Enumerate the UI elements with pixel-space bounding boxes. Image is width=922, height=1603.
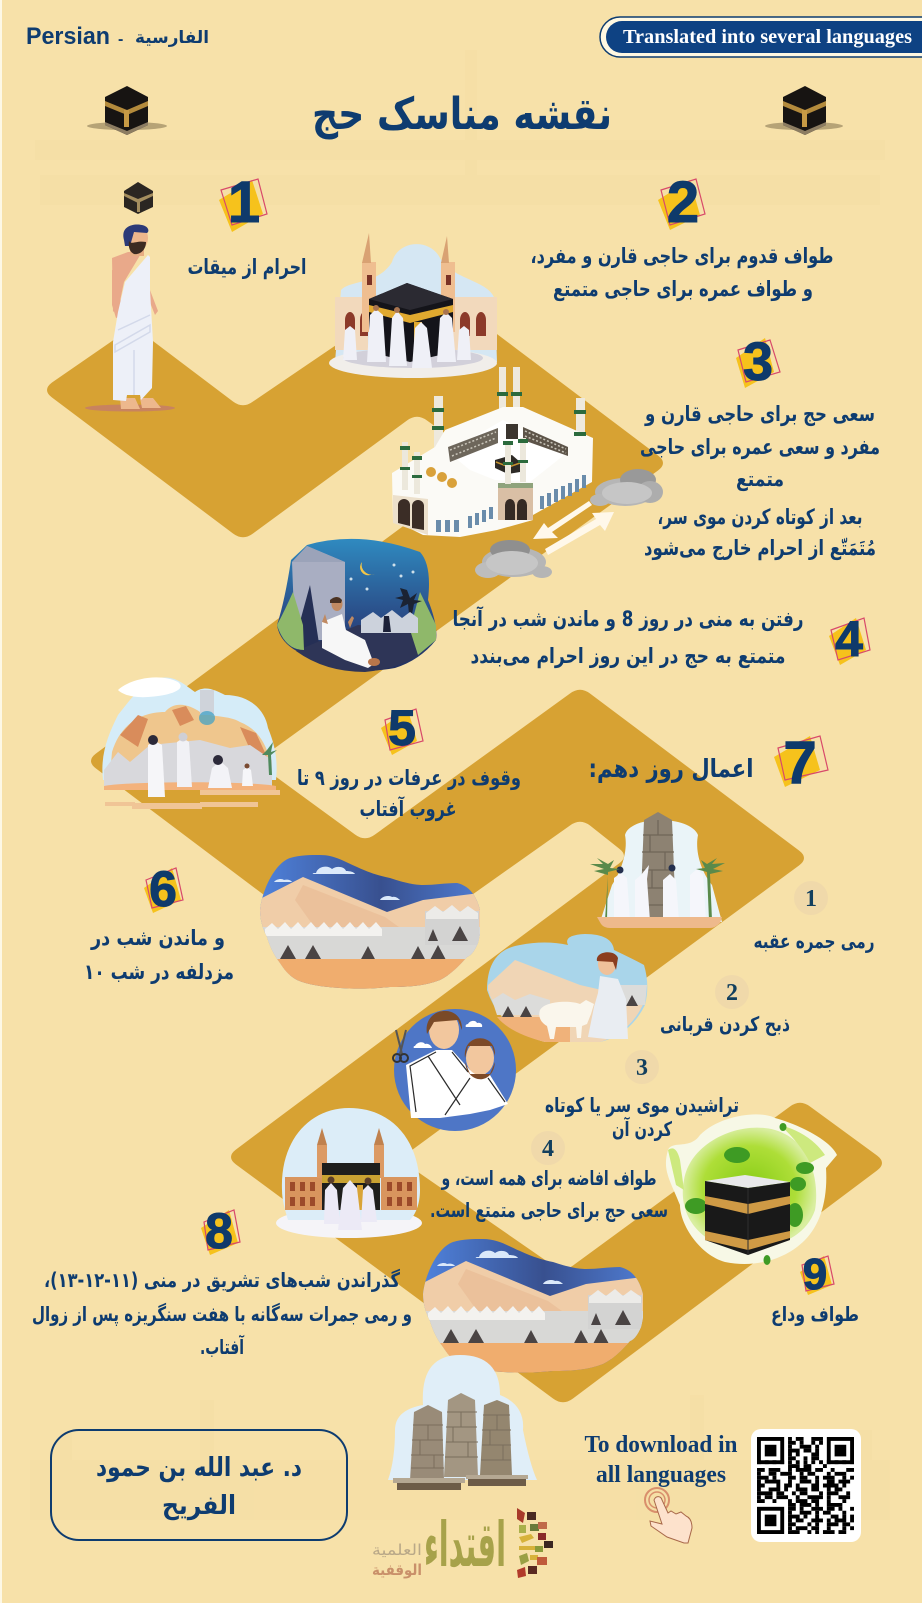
step 2 number: 2 (667, 170, 699, 235)
item 3 number: 3 (636, 1055, 648, 1081)
item 1 number: 1 (805, 886, 817, 912)
step 2 text: و طواف عمره برای حاجی متمتع (553, 277, 813, 301)
QR code (751, 1429, 861, 1542)
item 4 text: سعی حج برای حاجی متمتع است. (430, 1198, 668, 1222)
step 5 number: 5 (388, 700, 416, 756)
item 1 text: رمی جمره عقبه (754, 929, 874, 953)
item 4 number: 4 (542, 1136, 554, 1162)
step 6 text: مزدلفه در شب ۱۰ (84, 960, 234, 984)
step 8 number: 8 (205, 1203, 233, 1259)
icon: kaaba left (87, 86, 167, 135)
illustration: arafat (102, 677, 280, 809)
item 2 number: 2 (726, 980, 738, 1006)
item 4 text: طواف افاضه برای همه است، و (441, 1166, 656, 1190)
illustration: farewell kaaba on green splash (666, 1114, 837, 1265)
icon: kaaba right (765, 86, 843, 135)
step 5 text: غروب آفتاب (360, 796, 456, 821)
step 4 text: متمتع به حج در این روز احرام می‌بندد (470, 644, 786, 668)
step 6 text: و ماندن شب در (90, 926, 225, 950)
illustration: muzdalifah mountains (260, 855, 480, 993)
logo: الوقفية (372, 1561, 422, 1579)
step 5 text (297, 766, 521, 821)
icon: tapping hand (645, 1488, 692, 1543)
step 5 text: وقوف در عرفات در روز ۹ تا (297, 766, 521, 790)
author box: د. عبد الله بن حمود (96, 1453, 302, 1483)
step 6 number: 6 (149, 861, 177, 917)
step 2 text (530, 244, 834, 301)
illustration: tawaf ifadah kaaba (276, 1108, 422, 1238)
gold zigzag path (47, 286, 882, 1402)
step 8 text: گذراندن شب‌های تشریق در منی (۱۱-۱۲-۱۳)، (44, 1268, 400, 1292)
author box (51, 1430, 347, 1540)
logo: اقتداء (424, 1508, 506, 1581)
step 7 number (774, 729, 828, 796)
illustration: pilgrim in ihram (85, 224, 175, 412)
item 3 number (625, 1050, 659, 1084)
illustration: three jamarat pillars (388, 1355, 537, 1490)
download label (584, 1432, 738, 1488)
language label (26, 23, 209, 50)
step 2 text: طواف قدوم برای حاجی قارن و مفرد، (530, 244, 834, 268)
item 2 text: ذبح کردن قربانی (660, 1012, 790, 1036)
item 3 text (545, 1093, 739, 1141)
step 3 text: متمتع (736, 467, 784, 491)
step 4 text: رفتن به منی در روز 8 و ماندن شب در آنجا (452, 606, 804, 631)
step 8 text (32, 1268, 412, 1359)
step 4 number: 4 (835, 611, 863, 667)
icon: marwa rock (475, 540, 552, 578)
author box: الفريح (162, 1491, 236, 1521)
illustration: mina mountains (423, 1239, 643, 1377)
step 1 number: 1 (228, 170, 260, 235)
illustration: kaaba with pilgrims (329, 233, 497, 378)
title: نقشه مناسک حج (312, 89, 612, 140)
item 3 text: تراشیدن موی سر یا کوتاه (545, 1093, 739, 1117)
step 4 text (452, 606, 804, 668)
illustration: sacrifice (487, 934, 647, 1042)
item 2 number (715, 975, 749, 1009)
illustration: grand mosque (392, 367, 593, 537)
logo: العلمية (372, 1541, 422, 1559)
step 1 number (219, 170, 267, 235)
step 5 number (381, 700, 423, 756)
item 4 number (531, 1131, 565, 1165)
language label: Persian (26, 23, 110, 50)
item 3 text: کردن آن (612, 1116, 672, 1141)
illustration: stoning at jamrah (590, 812, 725, 928)
arrows between safa and marwa (533, 501, 614, 555)
logo (372, 1508, 553, 1581)
step 1 text: احرام از میقات (188, 255, 306, 279)
icon: small kaaba above pilgrim (124, 182, 153, 214)
step 9 text: طواف وداع (771, 1302, 859, 1326)
step 6 text (84, 926, 234, 984)
step 8 text: آفتاب. (200, 1334, 245, 1359)
download label: all languages (596, 1462, 726, 1488)
download label: To download in (584, 1432, 738, 1458)
badge: translated into several languages: Translated into several languages (623, 26, 912, 48)
language label: - (118, 31, 123, 48)
step 3 number (736, 332, 780, 392)
language label: الفارسية (135, 28, 209, 48)
illustration: shaving (393, 1009, 516, 1131)
step 3 number: 3 (743, 332, 773, 392)
step 7 number: 7 (783, 729, 817, 796)
step 7 heading: اعمال روز دهم: (588, 754, 754, 784)
item 1 number (794, 881, 828, 915)
item 4 text (430, 1166, 668, 1222)
step 2 number (658, 170, 705, 235)
step 8 text: و رمی جمرات سه‌گانه با هفت سنگریزه پس از زوال (32, 1302, 412, 1327)
step 9 number: 9 (803, 1250, 827, 1299)
step 4 number (829, 611, 870, 667)
badge: translated into several languages (600, 17, 922, 57)
icon: safa rock (590, 469, 663, 506)
illustration: night tent at mina (277, 539, 436, 672)
step 3 text (640, 402, 880, 561)
